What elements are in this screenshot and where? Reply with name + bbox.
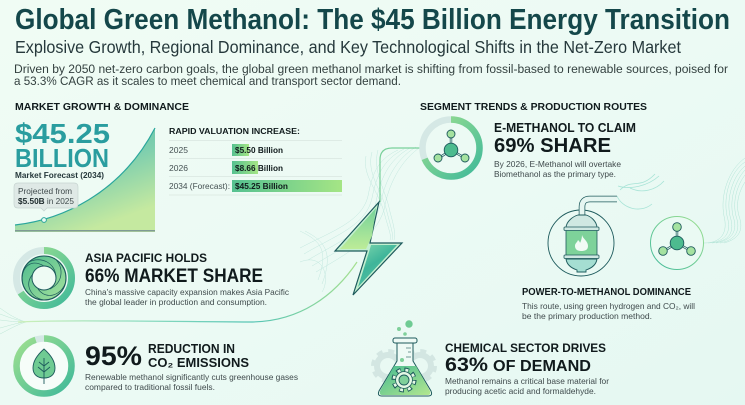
intro text: Driven by 2050 net-zero carbon goals, the global green methanol market is shifting from fossil-based to renewable sources, poised for bbox=[14, 62, 728, 76]
table: rapid valuation increase: $8.66 Billion bbox=[235, 164, 283, 173]
big number bbox=[15, 118, 110, 173]
heading bbox=[148, 342, 249, 370]
growth curve chart bbox=[15, 128, 155, 232]
panel: Asia Pacific bbox=[16, 250, 290, 307]
forecast label: Market Forecast (2034) bbox=[15, 171, 104, 180]
icon: molecule bbox=[650, 216, 704, 270]
description bbox=[445, 376, 609, 396]
callout: projected: Projected from bbox=[18, 187, 72, 196]
stat: 69% SHARE bbox=[494, 135, 611, 157]
panel: power-to-methanol bbox=[522, 199, 704, 321]
decorative wave hatching: centre bbox=[300, 146, 422, 292]
stat: 63% bbox=[445, 354, 488, 376]
description: This route, using green hydrogen and CO₂, will bbox=[522, 301, 695, 311]
table: rapid valuation increase: RAPID VALUATION INCREASE: bbox=[169, 126, 300, 136]
decorative wave hatching: right bbox=[704, 158, 745, 243]
subtitle: Explosive Growth, Regional Dominance, and Key Technological Shifts in the Net-Zero Market bbox=[15, 37, 681, 57]
big number: $45.25 bbox=[15, 118, 110, 149]
description: be the primary production method. bbox=[522, 311, 652, 321]
icon: lightning bolt bbox=[335, 202, 402, 295]
description: China's massive capacity expansion makes Asia Pacific bbox=[85, 287, 290, 297]
decorative wave hatching: left edge bbox=[0, 308, 26, 334]
connector from bolt to E-methanol ring bbox=[380, 148, 420, 202]
icon: molecule ring bbox=[422, 120, 480, 176]
heading: POWER-TO-METHANOL DOMINANCE bbox=[522, 287, 691, 298]
heading: E-METHANOL TO CLAIM bbox=[494, 121, 636, 135]
icon: Asia Pacific ring bbox=[16, 250, 72, 306]
intro text bbox=[14, 62, 728, 88]
table: rapid valuation increase: $45.25 Billion bbox=[235, 182, 288, 191]
table: rapid valuation increase bbox=[169, 126, 342, 195]
table: rapid valuation increase: $5.50 Billion bbox=[235, 146, 283, 155]
stat: OF DEMAND bbox=[493, 358, 591, 375]
heading: REDUCTION IN bbox=[148, 342, 235, 356]
stat: 66% MARKET SHARE bbox=[85, 266, 263, 287]
table: rapid valuation increase: 2026 bbox=[169, 164, 188, 173]
stat bbox=[445, 354, 591, 376]
description bbox=[85, 287, 290, 307]
panel: CO2 reduction bbox=[16, 338, 298, 394]
heading: segment trends: SEGMENT TRENDS & PRODUCTION ROUTES bbox=[420, 101, 647, 113]
icon: flask with gear bbox=[373, 320, 435, 396]
icon: leaf ring bbox=[16, 338, 72, 394]
intro text: a 53.3% CAGR as it scales to meet chemical and transport sector demand. bbox=[14, 74, 401, 88]
description bbox=[522, 301, 695, 321]
callout: projected: $5.50B in 2025 bbox=[18, 197, 75, 206]
description: Renewable methanol significantly cuts greenhouse gases bbox=[85, 372, 298, 382]
description: producing acetic acid and formaldehyde. bbox=[445, 386, 596, 396]
big number: BILLION bbox=[15, 145, 109, 173]
panel: chemical sector bbox=[373, 320, 609, 396]
description bbox=[85, 372, 298, 392]
table: rapid valuation increase: 2025 bbox=[169, 146, 189, 155]
stat: 95% bbox=[85, 341, 142, 371]
steam wisps bbox=[617, 174, 664, 209]
callout: projected bbox=[14, 183, 78, 211]
table: rapid valuation increase: 2034 (Forecast): bbox=[169, 182, 230, 191]
description: By 2026, E-Methanol will overtake bbox=[494, 159, 621, 169]
panel: E-methanol bbox=[422, 120, 636, 179]
description: compared to traditional fossil fuels. bbox=[85, 382, 215, 392]
heading: CO₂ EMISSIONS bbox=[148, 356, 249, 370]
icon: reactor vessel bbox=[548, 199, 617, 276]
heading: ASIA PACIFIC HOLDS bbox=[85, 253, 207, 265]
description: Biomethanol as the primary type. bbox=[494, 169, 616, 179]
heading: CHEMICAL SECTOR DRIVES bbox=[445, 343, 606, 355]
connector swoosh between Asia Pacific and bolt bbox=[18, 262, 357, 322]
description bbox=[494, 159, 621, 179]
description: Methanol remains a critical base material for bbox=[445, 376, 609, 386]
heading: market growth: MARKET GROWTH & DOMINANCE bbox=[15, 101, 189, 113]
description: the global leader in production and consumption. bbox=[85, 297, 267, 307]
